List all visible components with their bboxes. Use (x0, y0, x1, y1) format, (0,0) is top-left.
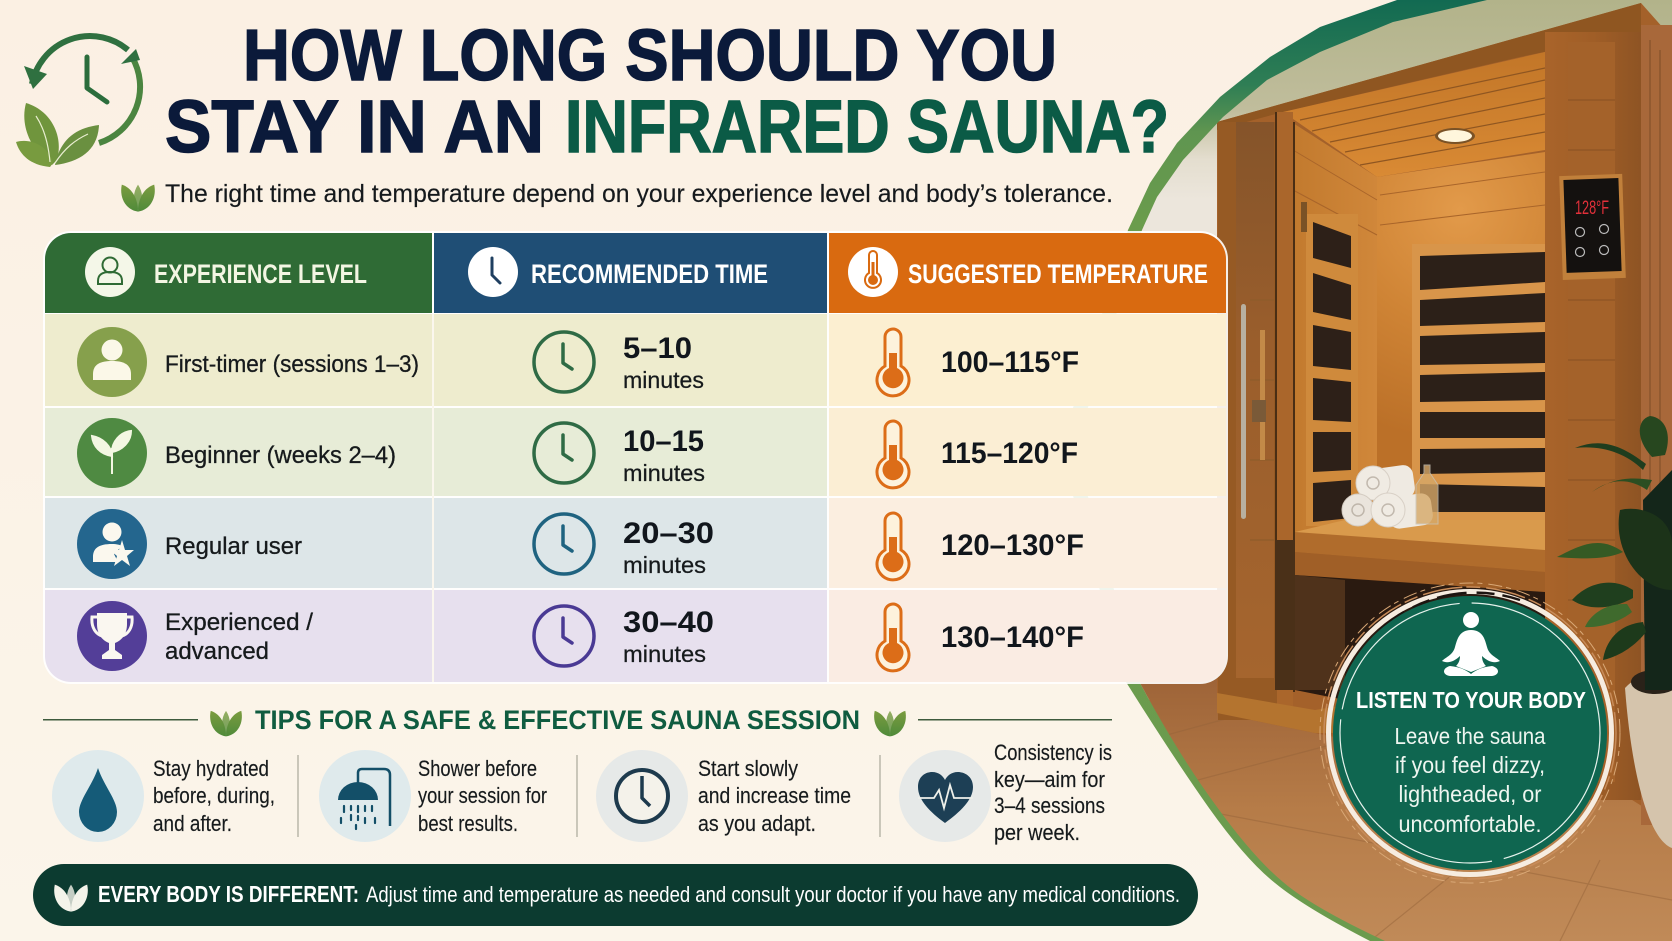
callout: listen to your body medallion: LISTEN TO YOUR BODY (1356, 687, 1586, 713)
tip: hydration: before, during, (153, 783, 275, 808)
tip: consistency (899, 740, 1112, 845)
callout: listen to your body medallion (1320, 583, 1620, 883)
table (43, 231, 1228, 684)
row: experienced / advanced: Experienced / (165, 609, 313, 636)
door handle (1241, 202, 1307, 519)
bench (1295, 520, 1545, 572)
ceiling light (1435, 128, 1475, 144)
table backgrounds and headers (45, 233, 1226, 682)
tip: start slowly (596, 750, 851, 842)
title: HOW LONG SHOULD YOU (243, 16, 1057, 96)
tip: hydration: and after. (153, 811, 232, 836)
icon: clock with cycle arrows and leaves (16, 36, 140, 167)
tip: start slowly: and increase time (698, 783, 851, 808)
header: suggested temperature (848, 247, 1208, 297)
tip: consistency: 3–4 sessions (994, 793, 1105, 818)
row: regular user: Regular user (165, 533, 302, 560)
row: experienced / advanced: minutes (623, 641, 706, 667)
tip: shower (319, 750, 547, 842)
dark space beneath bench (1295, 575, 1545, 698)
icon: subtitle leaf (121, 185, 155, 212)
row: experienced / advanced: advanced (165, 638, 269, 665)
towels and bottle (1342, 464, 1438, 530)
title: INFRARED SAUNA? (565, 85, 1169, 168)
photo panel: infrared sauna cabin (1060, 0, 1672, 941)
header: experience level: EXPERIENCE LEVEL (154, 259, 367, 289)
door base rail (1217, 693, 1345, 733)
callout: listen to your body medallion: lightheaded, or (1398, 781, 1542, 807)
right column (1545, 32, 1641, 800)
control panel (1559, 174, 1626, 280)
row: experienced / advanced: 30–40 (623, 606, 714, 639)
header: recommended time: RECOMMENDED TIME (531, 259, 768, 289)
row: first-timer: 5–10 (623, 332, 692, 365)
tip: shower: best results. (418, 811, 518, 836)
floor (1140, 676, 1672, 941)
control panel: 128°F (1575, 198, 1609, 219)
bottom banner: EVERY BODY IS DIFFERENT: (98, 881, 359, 907)
tip: consistency: Consistency is (994, 740, 1112, 765)
icon: meditating figure (1442, 612, 1500, 676)
bottom banner (33, 864, 1198, 926)
right side panel (1641, 25, 1672, 825)
tip: shower: your session for (418, 783, 547, 808)
ceiling (1283, 52, 1545, 177)
tip: start slowly: as you adapt. (698, 811, 816, 836)
tip: start slowly: Start slowly (698, 756, 798, 781)
row: first-timer: 100–115°F (941, 346, 1079, 379)
bottom banner: Adjust time and temperature as needed and consult your doctor if you have any medical conditions. (366, 882, 1180, 907)
row: first-timer: First-timer (sessions 1–3) (165, 351, 419, 378)
tip dividers (298, 755, 880, 837)
row: first-timer (77, 327, 1079, 397)
row: regular user: minutes (623, 552, 706, 578)
callout: listen to your body medallion: Leave the sauna (1394, 723, 1546, 749)
callout: listen to your body medallion: if you feel dizzy, (1395, 752, 1545, 778)
header: recommended time (468, 247, 768, 297)
row: regular user: 20–30 (623, 517, 714, 550)
tip: consistency: key—aim for (994, 767, 1105, 792)
left inner wall (1293, 123, 1377, 540)
row: beginner: Beginner (weeks 2–4) (165, 442, 396, 469)
callout: listen to your body medallion: uncomfortable. (1398, 811, 1542, 837)
left door column with glass (1218, 112, 1295, 720)
row: regular user (77, 509, 1084, 580)
side wall heater panels (1306, 214, 1358, 526)
subtitle: The right time and temperature depend on your experience level and body’s tolerance. (165, 180, 1113, 208)
row: beginner (77, 418, 1078, 488)
tip: hydration (52, 750, 275, 842)
row: beginner: 10–15 (623, 425, 704, 458)
header: suggested temperature: SUGGESTED TEMPERATURE (908, 259, 1208, 289)
title (165, 16, 1169, 168)
potted plant (1557, 416, 1672, 848)
green curved frame of the photo (1060, 0, 1672, 941)
header: experience level (85, 247, 367, 297)
sauna outer cabinet (1217, 3, 1672, 825)
row: regular user: 120–130°F (941, 529, 1084, 562)
tip: hydration: Stay hydrated (153, 756, 269, 781)
tip: consistency: per week. (994, 820, 1080, 845)
back wall (1377, 152, 1545, 470)
row: beginner: minutes (623, 460, 705, 486)
row: experienced / advanced (77, 601, 1084, 671)
row: experienced / advanced: 130–140°F (941, 621, 1084, 654)
tips heading (43, 705, 1112, 736)
cabinet top beam (1217, 3, 1641, 130)
tips heading: TIPS FOR A SAFE & EFFECTIVE SAUNA SESSION (255, 705, 860, 735)
tip: shower: Shower before (418, 756, 537, 781)
row: first-timer: minutes (623, 367, 704, 393)
title: STAY IN AN (165, 85, 544, 168)
back wall heater panels (1412, 244, 1545, 524)
row: beginner: 115–120°F (941, 437, 1078, 470)
